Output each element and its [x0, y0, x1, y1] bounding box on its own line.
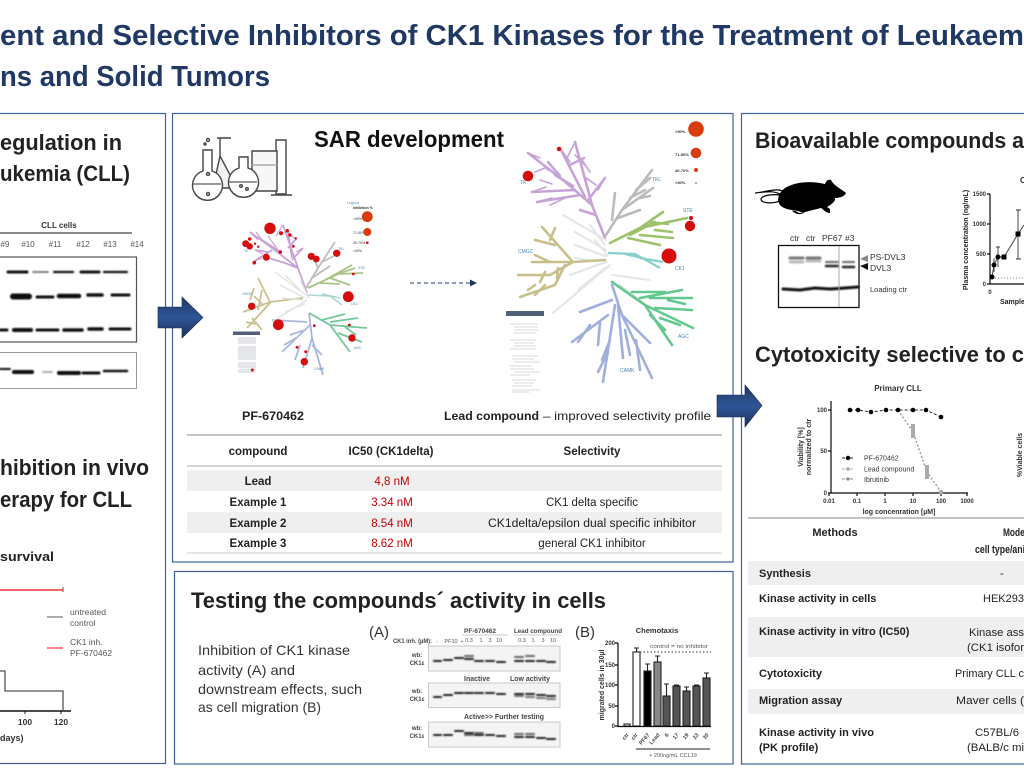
arrow: dashed from PF-670462 to lead compound: [410, 280, 477, 286]
panel: bioavailability and cytotoxicity: [742, 114, 1024, 764]
survival chart: [0, 550, 112, 743]
legend: inhibition percentage: Inhibition %: [353, 206, 374, 210]
chart: primary CLL viability: %Viable cells: [1017, 433, 1024, 477]
legend: treatment groups: PF-670462: [70, 648, 112, 658]
survival chart: 100: [18, 717, 32, 727]
AGC branch: [612, 282, 693, 345]
inhibition circles: [523, 147, 695, 264]
table: methods and models: Kinase activity in cells: [759, 593, 876, 605]
chart: plasma concentration: Plasma concentration (ng/mL): [963, 190, 970, 290]
figure B: chemotaxis bar chart: ctr: [621, 732, 631, 742]
figure B: chemotaxis bar chart: migrated cells in 30µl: [599, 649, 606, 720]
legend: compounds: Lead compound: [864, 466, 914, 474]
table: compound IC50 selectivity: 8.62 nM: [371, 538, 413, 550]
table: methods and models: Migration assay: [759, 695, 843, 707]
family labels: TKL: [652, 177, 661, 183]
western blot: DVL3: PS-DVL3: [870, 252, 906, 262]
table: methods and models: Kinase activity in vivo: [759, 727, 874, 739]
western blot: DVL3: Loading ctr: [870, 285, 908, 294]
figure A: western blots: 3: [488, 638, 492, 644]
arrow: from CLL panel to SAR panel: [158, 297, 203, 338]
heading: CK1 regulation in leukemia: egulation in: [0, 130, 122, 155]
heading: SAR development: SAR development: [314, 126, 504, 152]
figure A: western blots: CK1ε: [410, 697, 425, 703]
table: methods and models: Primary CLL c: [955, 668, 1024, 680]
figure B: chemotaxis bar chart: PF67: [638, 732, 652, 746]
western blot: CLL cells: #12: [76, 240, 90, 249]
STE branch: [308, 265, 363, 288]
table: methods and models: Maver cells (: [956, 695, 1024, 707]
legend: compounds: PF-670462: [864, 456, 899, 462]
figure B: chemotaxis bar chart: 150: [605, 663, 616, 669]
family labels: TK: [244, 249, 249, 253]
figure B: chemotaxis bar chart: 100: [605, 683, 616, 689]
icon: lab flasks: [193, 138, 292, 200]
chart: primary CLL viability: 1000: [960, 499, 974, 505]
family labels: [518, 177, 693, 374]
figure B: chemotaxis bar chart: 19: [682, 732, 691, 741]
table: compound IC50 selectivity: [187, 435, 722, 553]
heading: CK1 inhibition in vivo therapy for CLL: erapy for CLL: [0, 487, 132, 512]
western blot: CLL cells: [0, 221, 144, 388]
chart: plasma concentration: 1500: [973, 192, 987, 198]
chart: plasma concentration: 500: [976, 252, 987, 258]
western blot: DVL3: ctr: [790, 233, 800, 243]
title: ent and Selective Inhibitors of CK1 Kinases for the Treatment of Leukaem: [0, 20, 1024, 52]
western blot: CLL cells: #13: [103, 240, 117, 249]
legend: treatment groups: [47, 607, 112, 658]
panel: SAR development: [172, 114, 733, 562]
figure A: western blots: [369, 624, 562, 747]
text block: inhibition description: Inhibition of CK1 kinase: [198, 642, 350, 658]
legend: treatment groups: control: [70, 618, 96, 628]
figure A: western blots: Inactive: [464, 674, 490, 683]
legend: inhibition percentage: [347, 201, 374, 253]
family labels: STE: [358, 266, 365, 270]
legend: inhibition percentage: <40%: [353, 249, 362, 253]
table: methods and models: Cytotoxicity: [759, 668, 823, 680]
table: compound IC50 selectivity: CK1 delta specific: [546, 497, 638, 509]
table: methods and models: Kinase activity in vitro (IC50): [759, 626, 910, 638]
chart: plasma concentration: 0: [988, 290, 992, 296]
figure A: western blots: PF10: [444, 639, 458, 645]
figure B: chemotaxis bar chart: 0: [612, 724, 616, 730]
compound labels: Lead compound: [444, 409, 539, 423]
text block: inhibition description: activity (A) and: [198, 662, 295, 678]
chart: primary CLL viability: Viability [%]: [798, 427, 805, 467]
western blot: DVL3: ctr: [806, 233, 816, 243]
CAMK branch: [572, 285, 652, 382]
legend: inhibition percentage: [675, 121, 704, 185]
legend: inhibition percentage: 71-90%: [675, 152, 689, 157]
TKL branch: [606, 170, 653, 235]
figure A: western blots: wb:: [411, 689, 422, 695]
family labels: CK1: [675, 266, 685, 272]
legend: treatment groups: untreated: [70, 607, 106, 617]
legend: inhibition percentage: >90%: [353, 217, 362, 221]
table: methods and models: [748, 518, 1024, 754]
inset: kinase families list: [233, 332, 260, 373]
figure A: western blots: CK1 inh. (µM):: [393, 639, 432, 645]
heading: cytotoxicity selective: Cytotoxicity selective to c: [755, 342, 1024, 367]
figure A: western blots: CK1ε: [410, 661, 425, 667]
table: compound IC50 selectivity: Example 1: [230, 497, 287, 509]
table: compound IC50 selectivity: general CK1 inhibitor: [538, 538, 646, 550]
family labels: CAMK: [314, 367, 325, 371]
chart: primary CLL viability: 10: [910, 499, 917, 505]
table: methods and models: (CK1 isofor: [967, 642, 1024, 654]
panel: testing compounds in cells: [174, 572, 733, 764]
other kinases: [553, 215, 650, 313]
family labels: AGC: [678, 334, 689, 340]
figure A: western blots: (A): [369, 624, 389, 641]
western blot: CLL cells: #14: [130, 240, 144, 249]
western blot: DVL3: #3: [845, 233, 855, 243]
table: methods and models: (PK profile): [759, 742, 819, 754]
table: methods and models: Synthesis: [759, 568, 811, 580]
table: compound IC50 selectivity: Example 2: [230, 518, 286, 530]
figure B: chemotaxis bar chart: [575, 624, 711, 759]
western blot: CLL cells: #11: [49, 240, 62, 249]
CK1 branch: [308, 294, 342, 305]
table: compound IC50 selectivity: CK1delta/epsilon dual specific inhibitor: [488, 518, 696, 530]
figure B: chemotaxis bar chart: (B): [575, 624, 595, 641]
legend: inhibition percentage: >90%: [675, 129, 686, 134]
western blot: DVL3: PF67: [822, 233, 843, 243]
text block: inhibition description: as cell migration (B): [198, 699, 321, 715]
inhibition circles: [242, 223, 356, 371]
family labels: TKL: [338, 247, 344, 251]
chart: primary CLL viability: Primary CLL: [874, 384, 922, 393]
icon: mouse: [755, 180, 846, 214]
figure A: western blots: wb:: [411, 726, 422, 732]
figure A: western blots: Low activity: [510, 674, 551, 683]
arrow: from SAR panel to bioavailability panel: [717, 385, 762, 427]
TK branch: [250, 225, 307, 293]
table: compound IC50 selectivity: Selectivity: [564, 446, 621, 458]
legend: inhibition percentage: 40-70%: [675, 168, 689, 173]
family labels: AGC: [354, 346, 362, 350]
figure A: western blots: 10: [550, 638, 556, 644]
chart: primary CLL viability: 0: [824, 491, 828, 497]
western blot: DVL3: DVL3: [870, 263, 892, 273]
legend: inhibition percentage: <40%: [675, 180, 686, 185]
compound labels: PF-670462: [242, 409, 304, 423]
table: methods and models: Kinase ass: [969, 627, 1024, 639]
table: methods and models: Methods: [812, 527, 858, 539]
TKL branch: [306, 242, 335, 288]
figure A: western blots: -: [436, 639, 438, 645]
figure A: western blots: CK1ε: [410, 734, 425, 740]
figure B: chemotaxis bar chart: 200: [605, 641, 616, 647]
TK branch: [528, 142, 605, 238]
other kinases: [272, 272, 309, 322]
figure A: western blots: 0.3: [518, 638, 526, 644]
compound labels: [242, 409, 711, 423]
inset: kinase families list: [506, 311, 544, 392]
CMGC branch: [243, 278, 303, 330]
chart: plasma concentration: [963, 176, 1024, 306]
figure B: chemotaxis bar chart: 23: [692, 732, 701, 741]
chart: primary CLL viability: 100: [817, 408, 828, 414]
figure B: chemotaxis bar chart: + 200ng/mL CCL19: [649, 753, 697, 759]
legend: inhibition percentage: Legend: [347, 201, 359, 205]
legend: treatment groups: CK1 inh.: [70, 637, 103, 647]
text block: inhibition description: downstream effects, such: [198, 681, 362, 697]
family labels: CMGC: [518, 249, 534, 255]
AGC branch: [309, 313, 367, 352]
heading: CK1 inhibition in vivo therapy for CLL: hibition in vivo: [0, 455, 149, 480]
family labels: CAMK: [620, 368, 635, 374]
table: methods and models: HEK293: [983, 593, 1024, 605]
chart: plasma concentration: 1000: [973, 222, 987, 228]
survival chart: days): [0, 733, 24, 743]
figure B: chemotaxis bar chart: 17: [672, 732, 681, 741]
figure A: western blots: +: [460, 639, 464, 645]
figure B: chemotaxis bar chart: Chemotaxis: [636, 626, 678, 635]
table: compound IC50 selectivity: IC50 (CK1delta): [348, 446, 434, 458]
figure A: western blots: 1: [479, 638, 483, 644]
legend: compounds: Ibrutinib: [864, 477, 889, 484]
chart: primary CLL viability: 100: [936, 499, 947, 505]
panel: CK1 regulation and in vivo inhibition in CLL: [0, 114, 166, 764]
heading: CK1 inhibition in vivo therapy for CLL: [0, 455, 149, 512]
figure A: western blots: 1: [531, 638, 535, 644]
heading: CK1 regulation in leukemia: ukemia (CLL): [0, 161, 130, 186]
family labels: [242, 247, 365, 371]
survival chart: survival: [0, 550, 54, 564]
family labels: STE: [683, 208, 693, 214]
STE branch: [610, 212, 687, 245]
legend: compounds: [842, 456, 914, 484]
figure B: chemotaxis bar chart: 6: [664, 732, 671, 739]
table: compound IC50 selectivity: Lead: [245, 476, 271, 488]
figure A: western blots: Lead compound: [514, 629, 562, 635]
heading: testing the compounds activity: Testing the compounds´ activity in cells: [191, 588, 606, 613]
western blot: DVL3: [778, 233, 908, 308]
table: compound IC50 selectivity: 8.54 nM: [371, 518, 413, 530]
CK1 branch: [608, 253, 663, 268]
chart: primary CLL viability: log concenration [µM]: [863, 509, 935, 516]
chart: primary CLL viability: 0.1: [853, 499, 862, 505]
western blot: CLL cells: CLL cells: [41, 221, 77, 230]
title: ns and Solid Tumors: [0, 61, 270, 93]
figure B: chemotaxis bar chart: 30: [702, 732, 711, 741]
table: compound IC50 selectivity: 3.34 nM: [371, 497, 413, 509]
family labels: CMGC: [242, 292, 253, 296]
CMGC branch: [518, 227, 605, 297]
chart: primary CLL viability: normalized to ctr: [806, 419, 813, 475]
table: compound IC50 selectivity: Example 3: [230, 538, 286, 550]
legend: inhibition percentage: 40-70%: [353, 241, 365, 245]
western blot: CLL cells: #10: [21, 240, 35, 249]
figure A: western blots: 10: [496, 638, 502, 644]
table: compound IC50 selectivity: 4,8 nM: [374, 476, 410, 488]
figure B: chemotaxis bar chart: control = no inhibitor: [650, 644, 708, 650]
family labels: TK: [520, 180, 527, 186]
figure B: chemotaxis bar chart: Lead: [649, 732, 662, 746]
chart: kinome tree PF-670462: [233, 201, 374, 375]
chart: primary CLL viability: 0.01: [823, 499, 835, 505]
compound labels: – improved selectivity profile: [543, 409, 711, 423]
chart: primary CLL viability: [798, 384, 1024, 516]
family labels: CK1: [351, 302, 358, 306]
survival chart: 120: [54, 717, 68, 727]
title: [0, 20, 1024, 93]
figure B: chemotaxis bar chart: ctr: [630, 732, 640, 742]
figure A: western blots: Active>> Further testing: [464, 712, 544, 721]
chart: plasma concentration: 0: [983, 282, 987, 288]
chart: kinome tree lead compound: [506, 121, 704, 392]
figure A: western blots: 3: [541, 638, 545, 644]
table: compound IC50 selectivity: compound: [229, 446, 287, 458]
heading: CK1 regulation in leukemia: [0, 130, 130, 186]
legend: inhibition percentage: 71-90%: [353, 231, 365, 235]
table: methods and models: (BALB/c mi: [967, 742, 1024, 754]
table: methods and models: C57BL/6: [975, 727, 1019, 739]
figure B: chemotaxis bar chart: 50: [608, 704, 616, 710]
western blot: CLL cells: #9: [1, 240, 10, 249]
chart: primary CLL viability: 1: [883, 499, 887, 505]
figure A: western blots: PF-670462: [464, 629, 497, 635]
figure A: western blots: wb:: [411, 653, 422, 659]
CAMK branch: [272, 313, 323, 375]
text block: inhibition description: [198, 642, 362, 715]
table: methods and models: -: [1000, 568, 1004, 580]
figure A: western blots: 0.3: [465, 638, 473, 644]
chart: primary CLL viability: 50: [820, 449, 828, 455]
